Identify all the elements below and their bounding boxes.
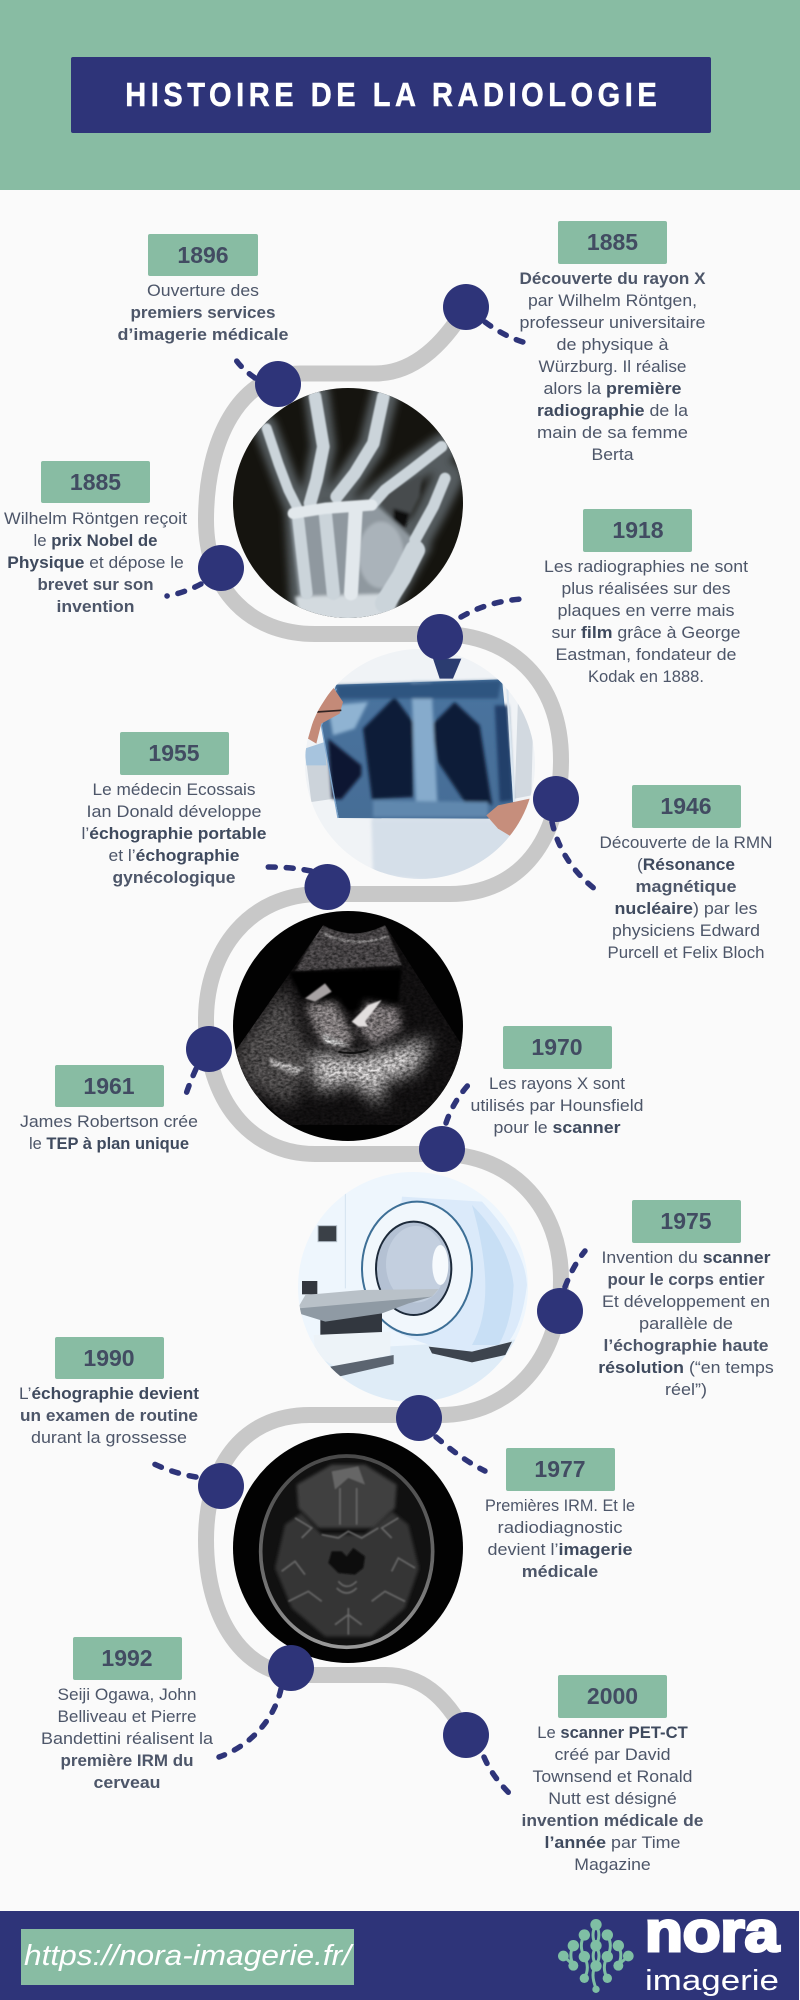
marker: 1955: [267, 864, 350, 910]
photo: hand x-ray: [233, 388, 463, 618]
event: 1885 left: Physique et dépose le: [7, 554, 184, 572]
event: 1992: [41, 1637, 214, 1792]
event: 1885 right: Berta: [592, 446, 634, 464]
website link: https://nora-imagerie.fr/: [24, 1940, 354, 1972]
event: 1975: réel”): [665, 1381, 707, 1399]
marker: 1961: [184, 1026, 232, 1101]
event: 1885 left: le prix Nobel de: [34, 532, 158, 550]
event: 1977: [485, 1448, 635, 1581]
event: 1975: Invention du scanner: [602, 1249, 771, 1267]
event: 1990: [19, 1337, 200, 1447]
photo: brain MRI: [233, 1433, 463, 1663]
event: 1992: première IRM du: [60, 1752, 194, 1770]
event: 1955: [82, 732, 266, 887]
event: 1975: l’échographie haute: [604, 1337, 768, 1355]
event: 2000: Le scanner PET-CT: [537, 1724, 688, 1742]
event: 1885 right: alors la première: [544, 380, 682, 398]
icon: nora logo mark: [558, 1919, 634, 1993]
footer band: [0, 1900, 799, 2000]
event: 1975: pour le corps entier: [608, 1271, 765, 1289]
event: 1946: Découverte de la RMN: [600, 834, 772, 852]
event: 1970: 1970: [531, 1034, 583, 1060]
event: 1885 left: invention: [56, 598, 134, 616]
event: 1961: James Robertson crée: [20, 1113, 198, 1131]
event: 1955: et l’échographie: [108, 847, 240, 865]
marker: 1885 right: [443, 284, 523, 342]
event: 1975: parallèle de: [639, 1315, 733, 1333]
photo: chest x-ray: [305, 649, 535, 879]
timeline path: [206, 307, 561, 1735]
marker: 1975: [537, 1251, 585, 1334]
event: 1946: [600, 785, 772, 962]
marker: 1885 left: [167, 545, 244, 596]
title: HISTOIRE DE LA RADIOLOGIE: [125, 76, 657, 113]
photo: ultrasound: [233, 911, 463, 1141]
event: 2000: [522, 1675, 704, 1874]
event: 1977: devient l’ imagerie: [488, 1541, 632, 1559]
event: 1990: durant la grossesse: [31, 1429, 187, 1447]
event: 1992: Belliveau et Pierre: [58, 1708, 196, 1726]
event: 1918: Les radiographies ne sont: [544, 558, 748, 576]
event: 1918: Eastman, fondateur de: [556, 646, 736, 664]
event: 1977: 1977: [534, 1456, 586, 1482]
event: 1992: cerveau: [94, 1774, 160, 1792]
event: 1990: 1990: [83, 1345, 135, 1371]
event: 1970: utilisés par Hounsfield: [470, 1097, 644, 1115]
event: 1885 right: 1885: [587, 229, 638, 255]
event: 1955: gynécologique: [112, 869, 236, 887]
marker: 2000: [443, 1712, 510, 1794]
event: 1955: Le médecin Ecossais: [92, 781, 256, 799]
event: 1975: [598, 1200, 774, 1399]
marker: 1970: [419, 1083, 470, 1172]
event: 1961: [20, 1065, 198, 1153]
event: 1885 right: de physique à: [556, 336, 669, 354]
event: 1970: [470, 1026, 644, 1137]
event: 1946: nucléaire ) par les: [614, 900, 758, 918]
event: 1946: (Résonance: [637, 856, 735, 874]
event: 1946: Purcell et Felix Bloch: [608, 944, 764, 962]
event: 1946: magnétique: [636, 878, 736, 896]
marker: 1896: [234, 357, 301, 407]
event: 1918: [544, 509, 748, 686]
event: 2000: créé par David: [554, 1746, 670, 1764]
event: 2000: Nutt est désigné: [548, 1790, 677, 1808]
photo: MRI scanner: [298, 1172, 528, 1402]
title: [71, 57, 711, 133]
event: 2000: l’année par Time: [544, 1834, 680, 1852]
event: 1885 right: radiographie de la: [537, 402, 689, 420]
event: 2000: Townsend et Ronald: [532, 1768, 692, 1786]
event: 1992: Bandettini réalisent la: [41, 1730, 214, 1748]
event: 2000: invention médicale de: [522, 1812, 704, 1830]
event: 1885 left: brevet sur son: [38, 576, 154, 594]
event: 1946: 1946: [660, 793, 712, 819]
event: 1975: résolution (“en temps: [598, 1359, 774, 1377]
event: 1896: Ouverture des: [147, 282, 259, 300]
website link: [21, 1929, 354, 1985]
marker: 1990: [146, 1460, 244, 1509]
event: 1896: d’imagerie médicale: [118, 326, 288, 344]
event: 1970: Les rayons X sont: [489, 1075, 625, 1093]
event: 1955: 1955: [148, 740, 200, 766]
event: 1885 right: main de sa femme: [537, 424, 688, 442]
event: 1961: le TEP à plan unique: [29, 1135, 189, 1153]
logo wordmark: nora: [645, 1900, 780, 1964]
event: 1977: radiodiagnostic: [498, 1519, 622, 1537]
marker: 1992: [219, 1645, 314, 1757]
event: 1918: Kodak en 1888.: [588, 668, 704, 686]
event: 1918: plus réalisées sur des: [562, 580, 730, 598]
event: 1885 right: [520, 221, 706, 464]
logo wordmark: imagerie: [645, 1965, 779, 1997]
event: 1992: 1992: [101, 1645, 153, 1671]
marker: 1977: [396, 1395, 485, 1471]
header band: [0, 0, 800, 190]
event: 1955: l’échographie portable: [82, 825, 266, 843]
event: 1990: un examen de routine: [20, 1407, 198, 1425]
event: 1975: 1975: [660, 1208, 712, 1234]
event: 1918: sur film grâce à George: [552, 624, 740, 642]
marker: 1946: [533, 776, 599, 892]
event: 2000: 2000: [587, 1683, 638, 1709]
event: 1885 right: professeur universitaire: [520, 314, 706, 332]
event: 1918: plaques en verre mais: [558, 602, 734, 620]
event: 1885 right: par Wilhelm Röntgen,: [528, 292, 697, 310]
event: 1970: pour le scanner: [494, 1119, 621, 1137]
event: 1955: Ian Donald développe: [86, 803, 262, 821]
event: 1896: [118, 234, 288, 344]
event: 1990: L’échographie devient: [19, 1385, 200, 1403]
event: 1977: médicale: [522, 1563, 598, 1581]
event: 1896: premiers services: [130, 304, 276, 322]
logo wordmark: [645, 1900, 780, 1997]
event: 1918: 1918: [612, 517, 664, 543]
event: 1885 right: Découverte du rayon X: [520, 270, 706, 288]
event: 1885 left: [4, 461, 187, 616]
event: 1961: 1961: [83, 1073, 135, 1099]
event: 2000: Magazine: [574, 1856, 651, 1874]
event: 1885 left: 1885: [70, 469, 121, 495]
event: 1992: Seiji Ogawa, John: [58, 1686, 196, 1704]
marker: 1918: [417, 599, 523, 660]
event: 1896: 1896: [177, 242, 229, 268]
event: 1885 left: Wilhelm Röntgen reçoit: [4, 510, 187, 528]
event: 1946: physiciens Edward: [612, 922, 760, 940]
event: 1977: Premières IRM. Et le: [485, 1497, 635, 1515]
event: 1885 right: Würzburg. Il réalise: [538, 358, 686, 376]
event: 1975: Et développement en: [602, 1293, 770, 1311]
